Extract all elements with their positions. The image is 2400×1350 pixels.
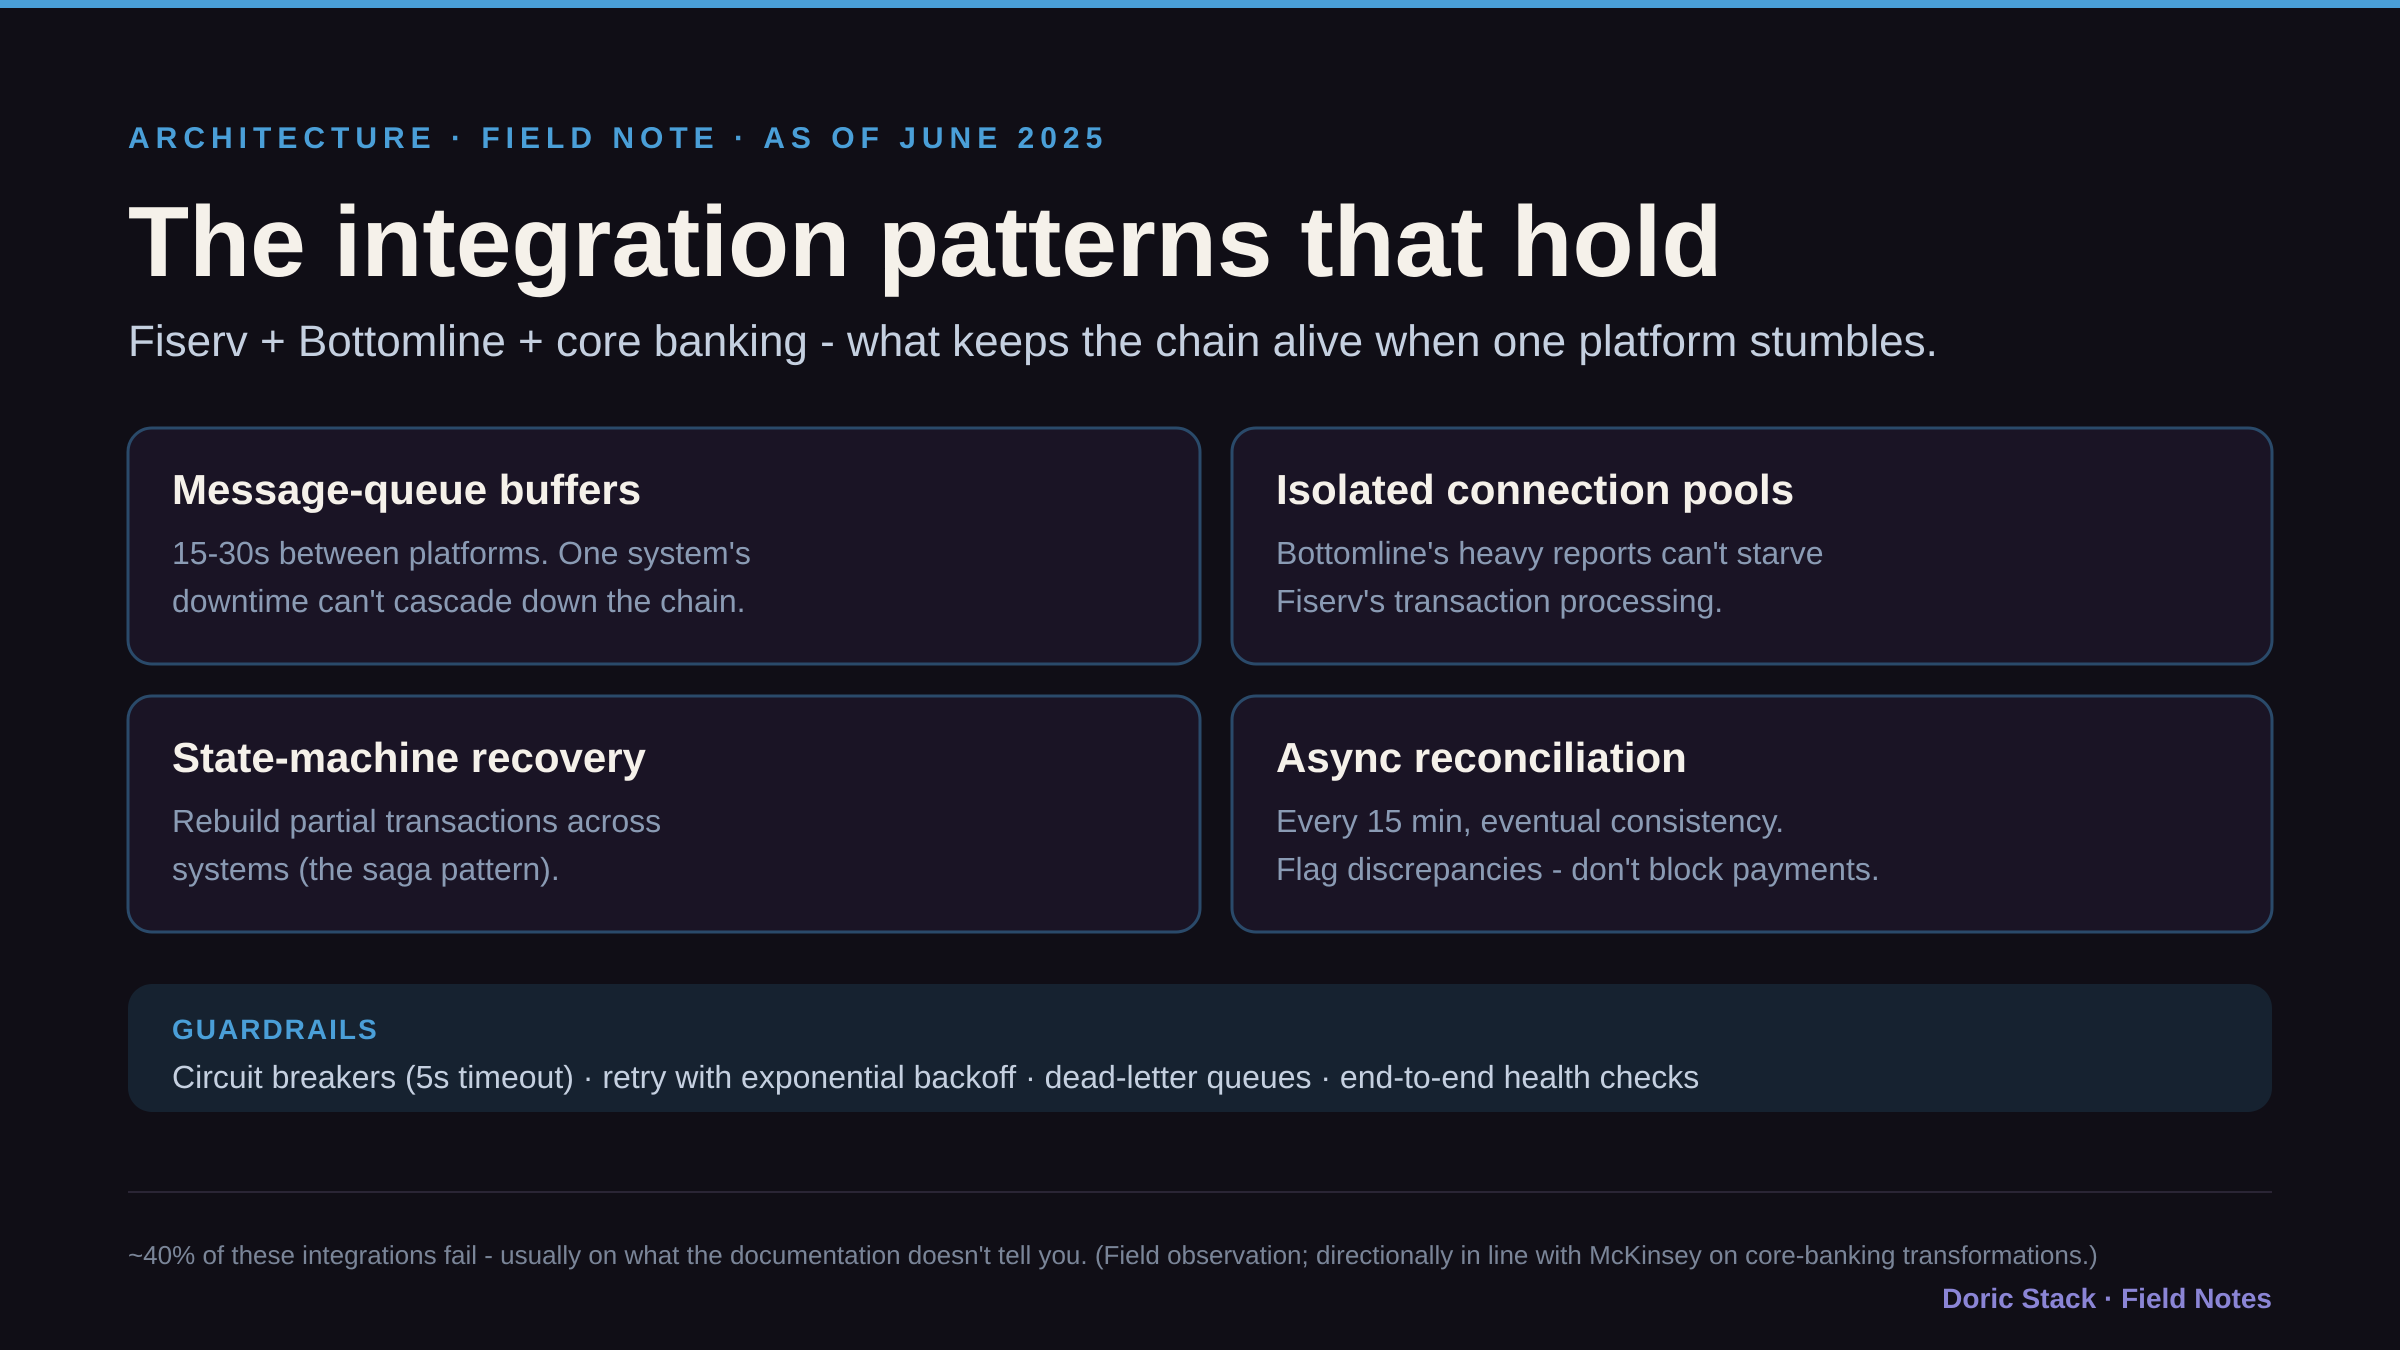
panel: message-queue buffers [128, 428, 1200, 664]
title: The integration patterns that hold [128, 186, 1722, 298]
card description: Rebuild partial transactions across [172, 803, 661, 839]
card description [172, 803, 661, 887]
card heading: Isolated connection pools [1276, 466, 1794, 513]
card description: Bottomline's heavy reports can't starve [1276, 535, 1824, 571]
guardrails label: GUARDRAILS [172, 1014, 379, 1045]
card description: downtime can't cascade down the chain. [172, 583, 746, 619]
subtitle: Fiserv + Bottomline + core banking - what keeps the chain alive when one platform stumbles. [128, 317, 1938, 366]
eyebrow: ARCHITECTURE · FIELD NOTE · AS OF JUNE 2025 [128, 122, 1108, 155]
card heading: Message-queue buffers [172, 466, 641, 513]
card heading: State-machine recovery [172, 734, 647, 781]
panel: state-machine recovery [128, 696, 1200, 932]
card description: Fiserv's transaction processing. [1276, 583, 1723, 619]
card description [1276, 803, 1880, 887]
footnote: ~40% of these integrations fail - usually on what the documentation doesn't tell you. (Field observation; directionally in line with McKinsey on core-banking transformations.) [128, 1240, 2098, 1270]
card description [1276, 535, 1824, 619]
card heading: Async reconciliation [1276, 734, 1687, 781]
signature: Doric Stack · Field Notes [1942, 1283, 2272, 1314]
panel: guardrails [128, 984, 2272, 1112]
top accent bar [0, 0, 2400, 8]
card description: Every 15 min, eventual consistency. [1276, 803, 1784, 839]
card description: 15-30s between platforms. One system's [172, 535, 751, 571]
card description: systems (the saga pattern). [172, 851, 560, 887]
card description: Flag discrepancies - don't block payments. [1276, 851, 1880, 887]
guardrails text: Circuit breakers (5s timeout) · retry with exponential backoff · dead-letter queues · end-to-end health checks [172, 1059, 1699, 1095]
panel: async reconciliation [1232, 696, 2272, 932]
card description [172, 535, 751, 619]
panel: isolated connection pools [1232, 428, 2272, 664]
